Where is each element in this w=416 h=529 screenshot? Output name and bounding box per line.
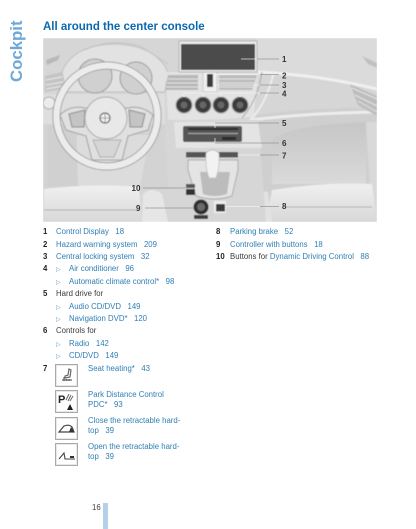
steering wheel xyxy=(56,66,158,166)
center console xyxy=(168,120,266,222)
item 10: 10 xyxy=(216,252,225,261)
item 9: 9 xyxy=(216,240,220,248)
icon: park distance control: P xyxy=(58,394,65,406)
parking brake xyxy=(214,201,226,213)
list: items 1 to 6: Control Display 18 xyxy=(56,227,124,236)
callout numbers: 4 xyxy=(282,90,287,98)
hazard and locking buttons xyxy=(203,71,217,92)
callout numbers: 8 xyxy=(282,202,287,211)
list: items 1 to 6: Controls for xyxy=(56,326,96,335)
switch row xyxy=(186,152,238,158)
center stack background xyxy=(166,72,258,120)
item 5: 5 xyxy=(43,289,47,298)
gear shifter xyxy=(206,150,219,178)
right vent xyxy=(350,84,377,116)
park distance control label xyxy=(88,390,164,409)
list: items 1 to 6: Radio 142 xyxy=(69,339,109,348)
icon: park distance control xyxy=(55,390,78,413)
leader lines xyxy=(143,59,279,208)
centre vents xyxy=(165,75,198,90)
item 3: 3 xyxy=(43,252,47,261)
callout numbers: 5 xyxy=(282,119,287,128)
item 6: 6 xyxy=(43,326,47,335)
dashboard illustration xyxy=(43,38,377,222)
section tab: Cockpit: Cockpit xyxy=(7,20,26,82)
item 8 xyxy=(216,227,293,236)
item 2 xyxy=(43,240,157,248)
title: All around the center console xyxy=(43,21,205,33)
dynamic driving buttons xyxy=(186,184,195,188)
page number: 16 xyxy=(92,503,101,512)
item 5b xyxy=(56,314,147,323)
list: items 1 to 6: Navigation DVD* 120 xyxy=(69,314,147,323)
left panel band xyxy=(43,94,165,124)
callout numbers: 3 xyxy=(282,81,287,90)
gauges xyxy=(78,59,152,94)
item 5 xyxy=(43,289,104,298)
list: items 1 to 6: CD/DVD 149 xyxy=(69,351,118,360)
item 4 xyxy=(43,264,134,273)
list: items 8 to 10: Buttons for Dynamic Driving Control 88 xyxy=(230,252,369,261)
item 3 xyxy=(43,252,150,261)
item 6a xyxy=(56,339,109,348)
icon: close hardtop xyxy=(55,417,78,440)
open hardtop label xyxy=(88,442,180,461)
callout numbers: 1 xyxy=(282,55,287,64)
list: items 1 to 6: Audio CD/DVD 149 xyxy=(69,302,141,310)
callout numbers: 6 xyxy=(282,139,287,148)
item 5a xyxy=(56,302,141,310)
callout numbers: 2 xyxy=(282,72,287,80)
park distance control label: PDC* 93 xyxy=(88,400,123,409)
icon: seat heating xyxy=(55,364,78,387)
close hardtop label: top 39 xyxy=(88,426,114,435)
list: items 1 to 6 xyxy=(43,227,174,360)
controller xyxy=(194,200,208,214)
close hardtop label: Close the retractable hard- xyxy=(88,416,180,425)
right footwell xyxy=(272,122,366,184)
list: items 1 to 6: Air conditioner 96 xyxy=(69,264,134,273)
list: items 8 to 10: Controller with buttons 18 xyxy=(230,240,323,248)
list: items 1 to 6: ▷ xyxy=(56,354,61,360)
left seat xyxy=(44,185,142,222)
list: items 1 to 6: Central locking system 32 xyxy=(56,252,150,261)
list: items 1 to 6: ▷ xyxy=(56,304,61,310)
item 4b xyxy=(56,276,174,286)
list: items 1 to 6: ▷ xyxy=(56,280,61,286)
callout numbers xyxy=(132,55,287,213)
list: items 1 to 6: Hard drive for xyxy=(56,289,103,298)
seat heating label: Seat heating* 43 xyxy=(88,364,150,373)
open hardtop label: Open the retractable hard- xyxy=(88,442,179,451)
left vent xyxy=(45,71,70,92)
open hardtop label: top 39 xyxy=(88,452,114,461)
instrument hood xyxy=(62,44,168,92)
left footwell xyxy=(43,125,168,190)
list: items 1 to 6: Automatic climate control* 98 xyxy=(69,276,174,286)
gear surround xyxy=(188,160,238,199)
list: items 8 to 10 xyxy=(216,227,369,261)
item 7 number: 7 xyxy=(43,364,47,373)
item 1: 1 xyxy=(43,227,47,236)
list: items 1 to 6: ▷ xyxy=(56,317,61,323)
page marker bar xyxy=(103,503,108,529)
item 10 xyxy=(216,252,369,261)
callout numbers: 9 xyxy=(136,204,141,213)
climate knobs xyxy=(176,97,248,113)
list: items 8 to 10: Parking brake 52 xyxy=(230,227,293,236)
item 2: 2 xyxy=(43,240,47,248)
list: items 1 to 6: ▷ xyxy=(56,342,61,348)
right seat xyxy=(266,184,377,222)
list: items 1 to 6: ▷ xyxy=(56,267,61,273)
item 4: 4 xyxy=(43,264,47,273)
item 8: 8 xyxy=(216,227,220,236)
control display xyxy=(179,41,257,72)
radio and CD controls xyxy=(183,126,242,142)
close hardtop label xyxy=(88,416,180,435)
item 1 xyxy=(43,227,124,236)
dash top right xyxy=(257,38,377,87)
list: items 1 to 6: Hazard warning system 209 xyxy=(56,240,157,248)
park distance control label: Park Distance Control xyxy=(88,390,164,399)
item 6 xyxy=(43,326,96,335)
callout numbers: 7 xyxy=(282,152,287,160)
icon: open hardtop xyxy=(55,443,78,466)
item 9 xyxy=(216,240,323,248)
callout numbers: 10 xyxy=(132,184,141,193)
item 6b xyxy=(56,351,118,360)
